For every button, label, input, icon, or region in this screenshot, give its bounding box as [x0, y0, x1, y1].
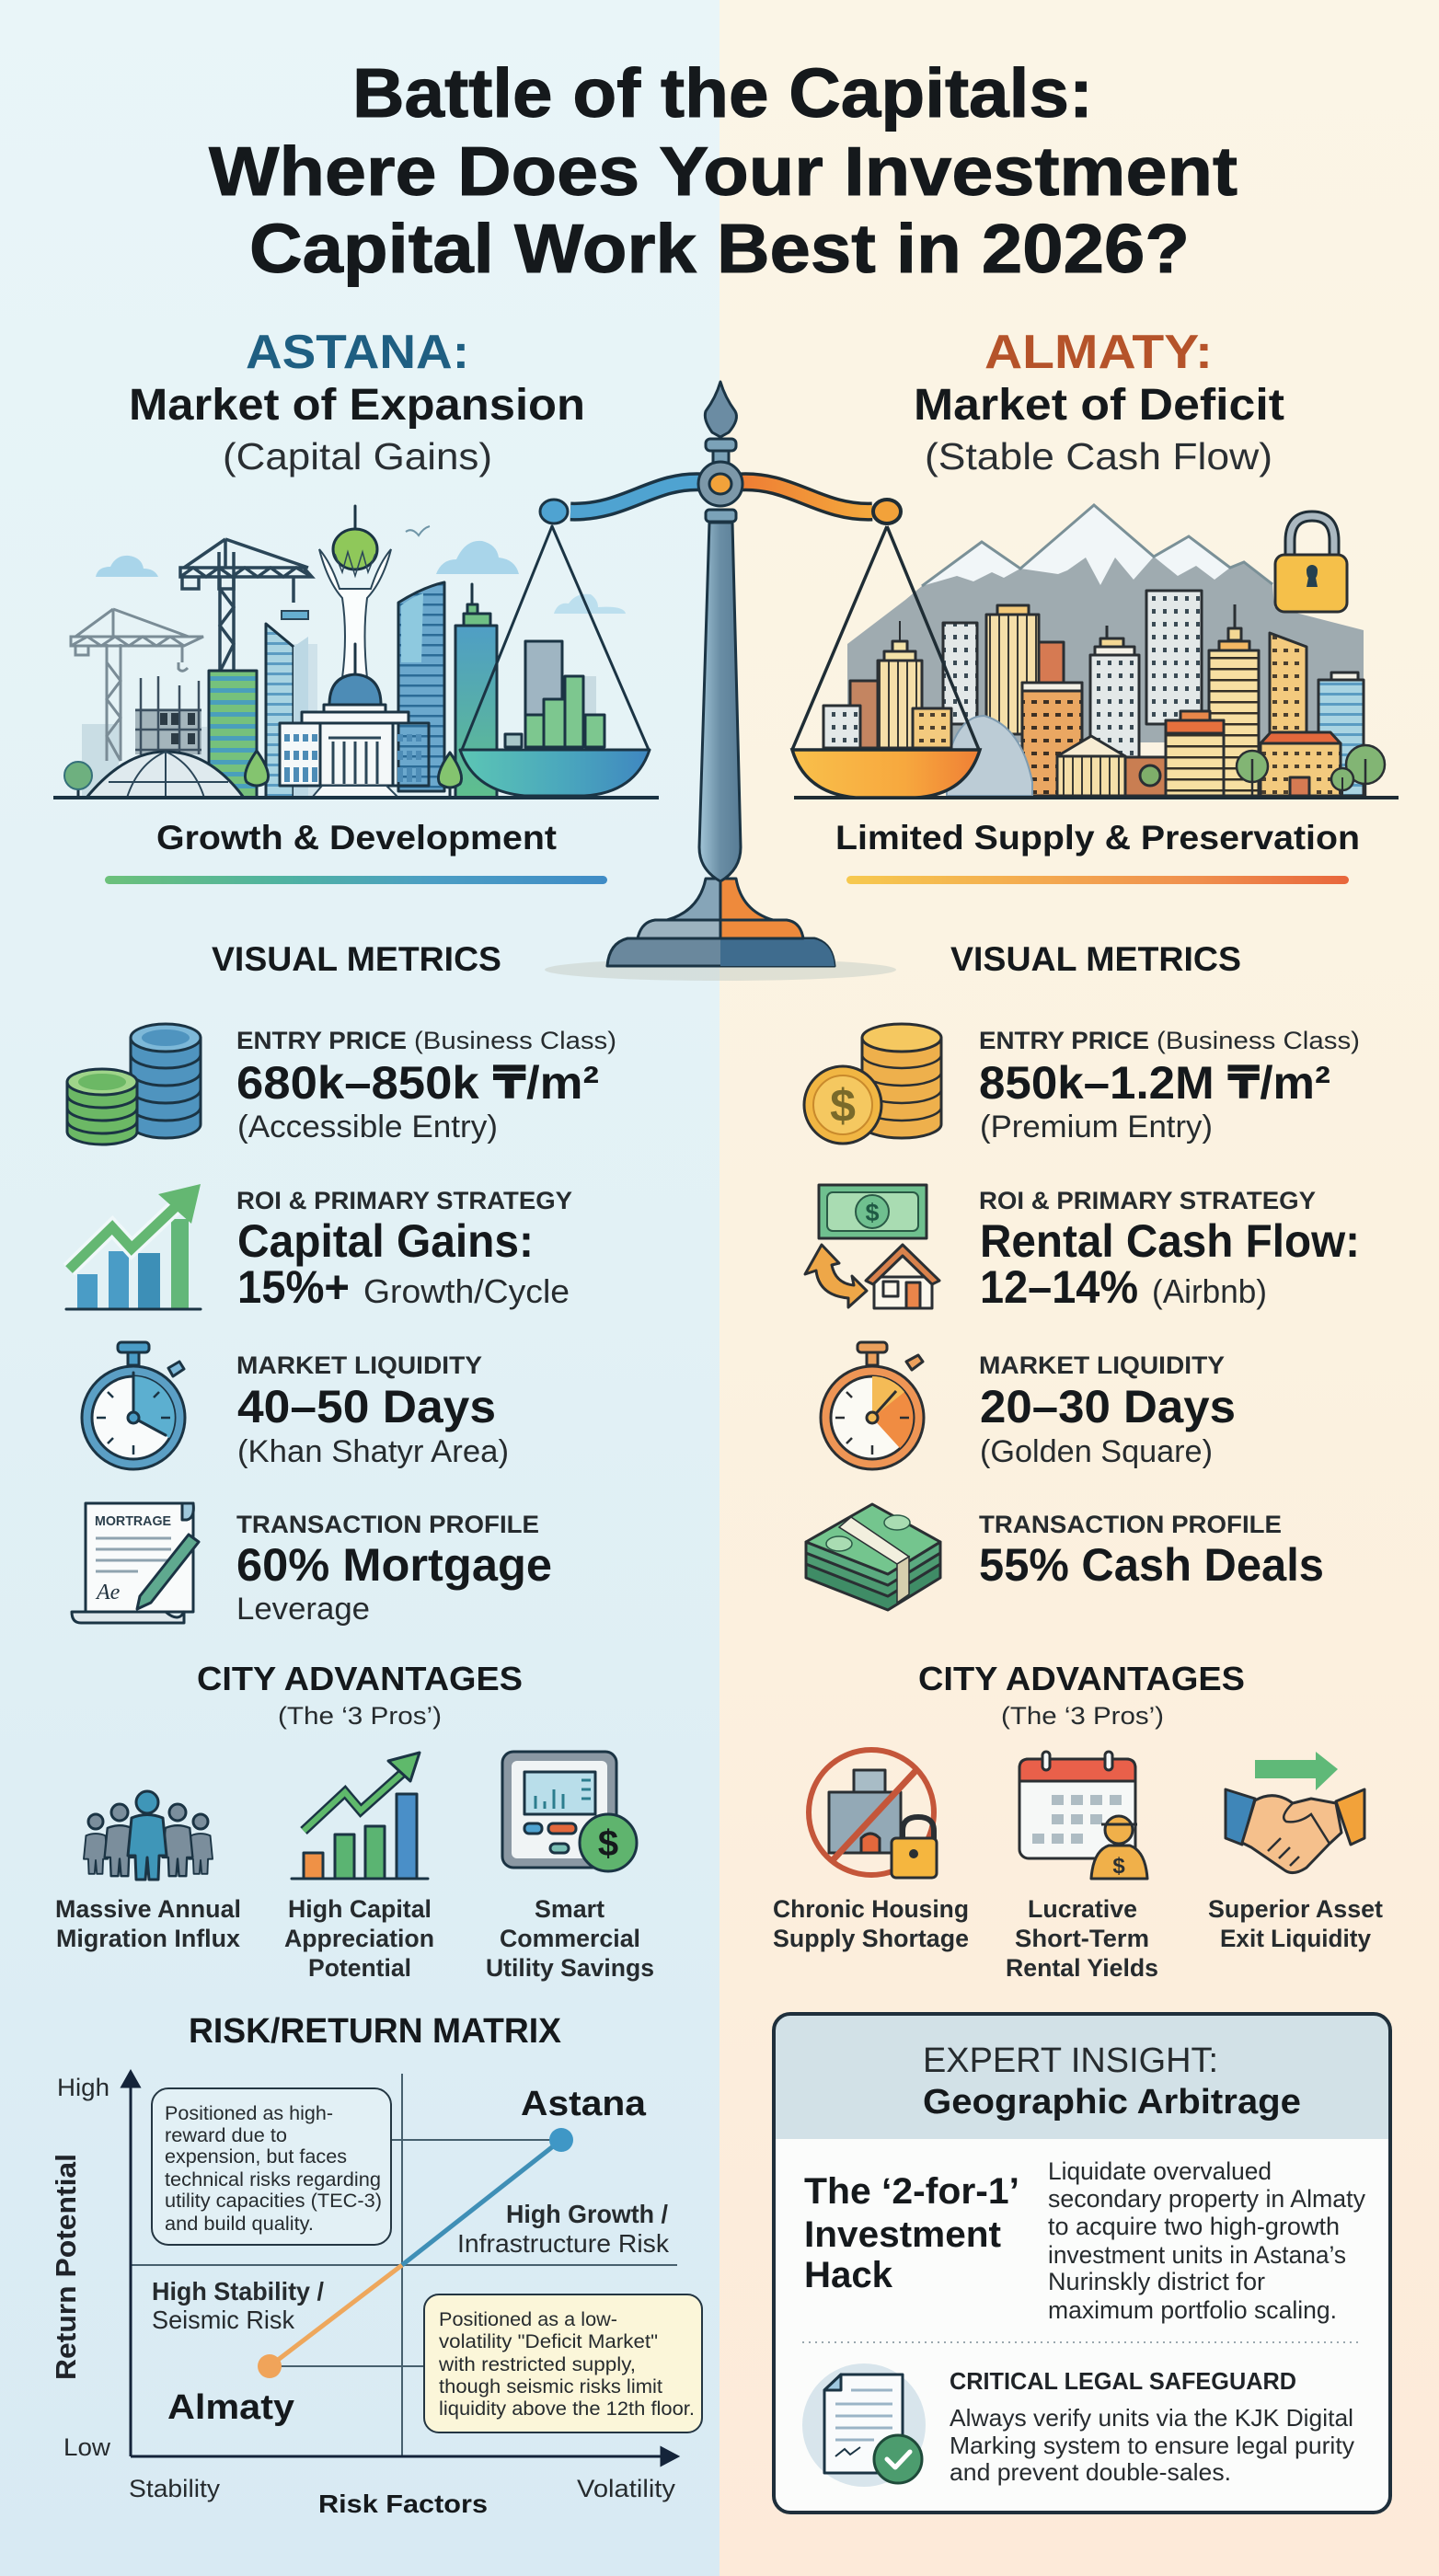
- metric: entry price Almaty: [804, 1024, 1360, 1144]
- skyline: Astana: [53, 506, 659, 799]
- metric: ROI Almaty: [805, 1185, 1360, 1313]
- icon: gold coins: $: [830, 1080, 856, 1132]
- callout: Astana: and build quality.: [165, 2214, 314, 2235]
- metric: liquidity Almaty: (Golden Square): [980, 1434, 1213, 1469]
- callout: Astana: Positioned as high-: [165, 2103, 333, 2124]
- legal safeguard text: CRITICAL LEGAL SAFEGUARD: [950, 2367, 1296, 2395]
- metric: entry price Astana: 680k–850k ₸/m²: [236, 1057, 599, 1109]
- metric: entry price Astana: (Business Class): [414, 1027, 616, 1054]
- label: high growth: [457, 2200, 670, 2258]
- callout: Almaty: volatility "Deficit Market": [439, 2331, 658, 2352]
- mountains: [847, 505, 1364, 742]
- icon: Bayterek tower: [319, 506, 391, 678]
- icon: mortgage document: MORTRAGE: [95, 1513, 171, 1529]
- heading: Astana: [129, 326, 585, 477]
- line: Almaty to center: [270, 2265, 402, 2366]
- metric: liquidity Astana: [82, 1342, 509, 1469]
- metric: liquidity Almaty: MARKET LIQUIDITY: [979, 1351, 1225, 1379]
- label: utility: Utility Savings: [486, 1954, 654, 1982]
- metric: liquidity Astana: (Khan Shatyr Area): [237, 1434, 509, 1469]
- callout: Almaty: [424, 2294, 702, 2432]
- post: [699, 523, 741, 881]
- label: utility: [486, 1895, 654, 1982]
- callout: Astana: technical risks regarding: [165, 2169, 381, 2191]
- title: Battle of the Capitals:: [352, 54, 1093, 132]
- ground line: [794, 796, 1399, 799]
- metric: transaction Astana: [72, 1503, 552, 1627]
- metric: transaction Almaty: [806, 1504, 1324, 1610]
- legal safeguard text: Marking system to ensure legal purity: [950, 2432, 1354, 2459]
- label: high stability: High Stability /: [152, 2277, 324, 2306]
- label: appreciation: Appreciation: [284, 1925, 434, 1952]
- label: high growth: Infrastructure Risk: [457, 2229, 670, 2258]
- icon: stopwatch orange: [821, 1342, 924, 1469]
- icon: growth chart: [66, 1184, 201, 1309]
- label: migration: Migration Influx: [56, 1925, 240, 1952]
- label: appreciation: High Capital: [288, 1895, 432, 1923]
- label: exit liquidity: Exit Liquidity: [1220, 1925, 1371, 1952]
- icon: smart meter: [502, 1752, 637, 1871]
- label: appreciation: Potential: [308, 1954, 411, 1982]
- icon: mortgage document: Ae: [95, 1581, 121, 1604]
- label: utility: Smart: [535, 1895, 604, 1923]
- skyline: Almaty: [794, 505, 1399, 799]
- hack title: Hack: [804, 2255, 893, 2295]
- axis labels: Stability: [129, 2475, 221, 2502]
- label: housing shortage: Supply Shortage: [773, 1925, 969, 1952]
- heading: EXPERT INSIGHT:: [923, 2041, 1218, 2080]
- hack body: to acquire two high-growth: [1048, 2213, 1340, 2240]
- trees: [64, 751, 462, 798]
- base: [607, 879, 835, 966]
- label: housing shortage: Chronic Housing: [773, 1895, 969, 1923]
- y axis: [122, 2072, 139, 2456]
- legal safeguard text: Always verify units via the KJK Digital: [950, 2404, 1353, 2432]
- panel: city advantages Almaty: CITY ADVANTAGES: [918, 1660, 1245, 1697]
- icon: calendar and host: $: [1112, 1854, 1125, 1879]
- striped green block: [209, 671, 257, 798]
- label: rental yields: Short-Term: [1015, 1925, 1149, 1952]
- metric: entry price Almaty: (Premium Entry): [980, 1110, 1213, 1144]
- pivot: [698, 462, 743, 506]
- panel: city advantages Almaty: (The ‘3 Pros’): [1001, 1702, 1164, 1730]
- callout: Astana: expension, but faces: [165, 2146, 347, 2168]
- callout: Astana: [152, 2088, 391, 2245]
- icon: far crane: [71, 609, 203, 761]
- left chains: [462, 526, 649, 750]
- icon: verified document: [802, 2363, 926, 2487]
- metric: ROI Astana: Capital Gains:: [237, 1215, 534, 1267]
- skyscraper: curved blue tower: [398, 582, 444, 791]
- heading: visual metrics left: VISUAL METRICS: [212, 940, 501, 978]
- hack body: investment units in Astana’s: [1048, 2241, 1346, 2269]
- callout: Almaty: Positioned as a low-: [439, 2309, 617, 2330]
- scale shadow: [545, 959, 896, 981]
- metric: entry price Almaty: ENTRY PRICE: [979, 1027, 1149, 1054]
- label: rental yields: Lucrative: [1028, 1895, 1137, 1923]
- label: high growth: High Growth /: [506, 2200, 668, 2228]
- tagline: Astana: Growth & Development: [156, 819, 557, 857]
- hack body: maximum portfolio scaling.: [1048, 2296, 1337, 2324]
- callout: Astana: utility capacities (TEC-3): [165, 2191, 382, 2212]
- callout: Astana: reward due to: [165, 2125, 287, 2146]
- hack body: Nurinskly district for: [1048, 2268, 1265, 2295]
- beam: left arm: [570, 482, 704, 512]
- icon: no building and lock: [809, 1750, 937, 1878]
- metric: entry price Astana: [67, 1024, 616, 1144]
- panel: risk return matrix: [50, 2012, 702, 2518]
- left pan contents: [505, 641, 604, 747]
- right chains: [792, 526, 979, 750]
- label: high stability: [152, 2277, 324, 2334]
- metric: entry price Astana: ENTRY PRICE: [236, 1027, 407, 1054]
- ground line: [53, 796, 659, 799]
- metric: transaction Astana: Leverage: [236, 1592, 370, 1627]
- metric: liquidity Almaty: [821, 1342, 1236, 1469]
- heading: Geographic Arbitrage: [923, 2083, 1301, 2122]
- metric: transaction Astana: TRANSACTION PROFILE: [236, 1511, 539, 1538]
- axis labels: Return Potential: [50, 2154, 82, 2380]
- background: right half Almaty: [720, 0, 1439, 2576]
- label: rental yields: [1006, 1895, 1158, 1982]
- point: Astana: [549, 2128, 573, 2152]
- panel: city advantages Astana: CITY ADVANTAGES: [197, 1660, 523, 1697]
- hack body: Liquidate overvalued: [1048, 2157, 1272, 2185]
- metric: transaction Almaty: 55% Cash Deals: [979, 1539, 1324, 1591]
- right pan contents: [823, 621, 951, 748]
- icon: stopwatch blue: [82, 1342, 185, 1469]
- gradient bar: Astana: [105, 876, 607, 884]
- callout: Almaty: liquidity above the 12th floor.: [439, 2398, 695, 2420]
- axis labels: Low: [63, 2433, 111, 2461]
- background: left half Astana: [0, 0, 720, 2576]
- heading: visual metrics right: VISUAL METRICS: [950, 940, 1241, 978]
- icon: smart meter: $: [598, 1823, 618, 1864]
- hack body: secondary property in Almaty: [1048, 2185, 1365, 2213]
- metric: liquidity Almaty: 20–30 Days: [980, 1381, 1236, 1432]
- title: [209, 54, 1238, 287]
- icon: people crowd: [84, 1791, 213, 1880]
- mosaic rock dome: [947, 716, 1032, 796]
- title: Capital Work Best in 2026?: [249, 210, 1190, 287]
- point: Almaty: [258, 2354, 282, 2378]
- heading: Almaty: (Stable Cash Flow): [925, 435, 1272, 477]
- icon: bar chart with arrow: [292, 1753, 428, 1879]
- scaffold building: [135, 676, 201, 754]
- museum: [1057, 736, 1125, 796]
- tagline: Almaty: Limited Supply & Preservation: [835, 819, 1360, 857]
- balance scale: [460, 382, 980, 981]
- dome glass structure: [86, 752, 244, 798]
- metric: entry price Astana: (Accessible Entry): [237, 1110, 498, 1144]
- callout: Almaty: with restricted supply,: [438, 2354, 636, 2375]
- icon: mortgage document: [72, 1503, 199, 1623]
- icon: bill, house and arrows: [805, 1185, 939, 1308]
- parliament building: [280, 644, 429, 798]
- skyscraper: green tower: [455, 584, 497, 798]
- heading: Almaty: ALMATY:: [984, 326, 1213, 379]
- label: utility: Commercial: [500, 1925, 640, 1952]
- hack title: The ‘2-for-1’: [804, 2171, 1019, 2212]
- metric: liquidity Astana: MARKET LIQUIDITY: [236, 1351, 482, 1379]
- legal safeguard text: and prevent double-sales.: [950, 2458, 1231, 2486]
- padlock: [1275, 516, 1347, 612]
- axis labels: High: [57, 2074, 109, 2101]
- label: Almaty: Almaty: [167, 2388, 294, 2427]
- panel: city advantages Astana: [55, 1660, 654, 1982]
- finial: [705, 382, 736, 522]
- header band: [774, 2014, 1390, 2139]
- metric: entry price Almaty: 850k–1.2M ₸/m²: [979, 1057, 1330, 1109]
- panel: expert insight: [774, 2014, 1390, 2513]
- icon: handshake with arrow: [1226, 1752, 1364, 1873]
- heading: Almaty: Market of Deficit: [914, 381, 1284, 430]
- metric: ROI Astana: [66, 1184, 572, 1313]
- icon: cash stack: [806, 1504, 940, 1610]
- hack title: Investment: [804, 2214, 1001, 2255]
- chart grid lines: [131, 2074, 677, 2456]
- axis labels: [50, 2074, 676, 2518]
- metric: entry price Almaty: (Business Class): [1157, 1027, 1360, 1054]
- label: Astana: Astana: [521, 2085, 647, 2123]
- heading: Astana: (Capital Gains): [223, 435, 492, 477]
- metric: liquidity Astana: 40–50 Days: [237, 1381, 496, 1432]
- label: migration: Massive Annual: [55, 1895, 241, 1923]
- trees: [1237, 745, 1385, 796]
- metric: transaction Almaty: TRANSACTION PROFILE: [979, 1511, 1282, 1538]
- icon: tall crane: [180, 539, 312, 672]
- metric: ROI Astana: 15%+: [237, 1261, 350, 1313]
- panel: city advantages Astana: (The ‘3 Pros’): [278, 1702, 442, 1730]
- metric: ROI Astana: Growth/Cycle: [363, 1272, 570, 1310]
- heading: Astana: Market of Expansion: [129, 381, 585, 430]
- legal safeguard text: [950, 2367, 1354, 2486]
- label: housing shortage: [773, 1895, 969, 1952]
- heading: [923, 2041, 1301, 2122]
- metric: ROI Almaty: 12–14%: [980, 1261, 1138, 1313]
- metric: ROI Almaty: Rental Cash Flow:: [980, 1215, 1360, 1267]
- axis labels: Volatility: [577, 2475, 676, 2502]
- icon: bill, house and arrows: $: [865, 1199, 880, 1226]
- label: rental yields: Rental Yields: [1006, 1954, 1158, 1982]
- beam end: left: [540, 500, 568, 523]
- panel: city advantages Almaty: [773, 1660, 1383, 1982]
- gradient bar: Almaty: [846, 876, 1349, 884]
- metric: ROI Almaty: ROI & PRIMARY STRATEGY: [979, 1187, 1316, 1214]
- panel: risk return matrix: RISK/RETURN MATRIX: [189, 2012, 562, 2051]
- hack title: [804, 2171, 1019, 2295]
- label: migration: [55, 1895, 241, 1952]
- axis labels: Risk Factors: [318, 2490, 488, 2518]
- icon: calendar and host: [1019, 1752, 1147, 1879]
- label: appreciation: [284, 1895, 434, 1982]
- beam end: right: [873, 500, 901, 523]
- icon: coin stacks: [67, 1024, 201, 1144]
- right pan: [792, 750, 980, 798]
- label: high stability: Seismic Risk: [152, 2306, 295, 2334]
- heading: Astana: ASTANA:: [246, 326, 469, 379]
- metric: ROI Almaty: (Airbnb): [1152, 1272, 1267, 1310]
- title: Where Does Your Investment: [209, 132, 1238, 210]
- low red-roof house: [1261, 732, 1341, 796]
- callout: Almaty: though seismic risks limit: [439, 2376, 662, 2398]
- heading: Almaty: [914, 326, 1284, 477]
- hack body: [1048, 2157, 1365, 2324]
- metric: transaction Astana: 60% Mortgage: [236, 1539, 552, 1591]
- label: exit liquidity: [1208, 1895, 1383, 1952]
- left pan: [460, 750, 650, 796]
- icon: gold coins: [804, 1024, 941, 1144]
- x axis: [131, 2448, 677, 2465]
- beam: right arm: [738, 482, 872, 512]
- metric: ROI Astana: ROI & PRIMARY STRATEGY: [236, 1187, 572, 1214]
- label: exit liquidity: Superior Asset: [1208, 1895, 1383, 1923]
- panel outline: [774, 2014, 1390, 2513]
- line: center to Astana: [402, 2140, 561, 2265]
